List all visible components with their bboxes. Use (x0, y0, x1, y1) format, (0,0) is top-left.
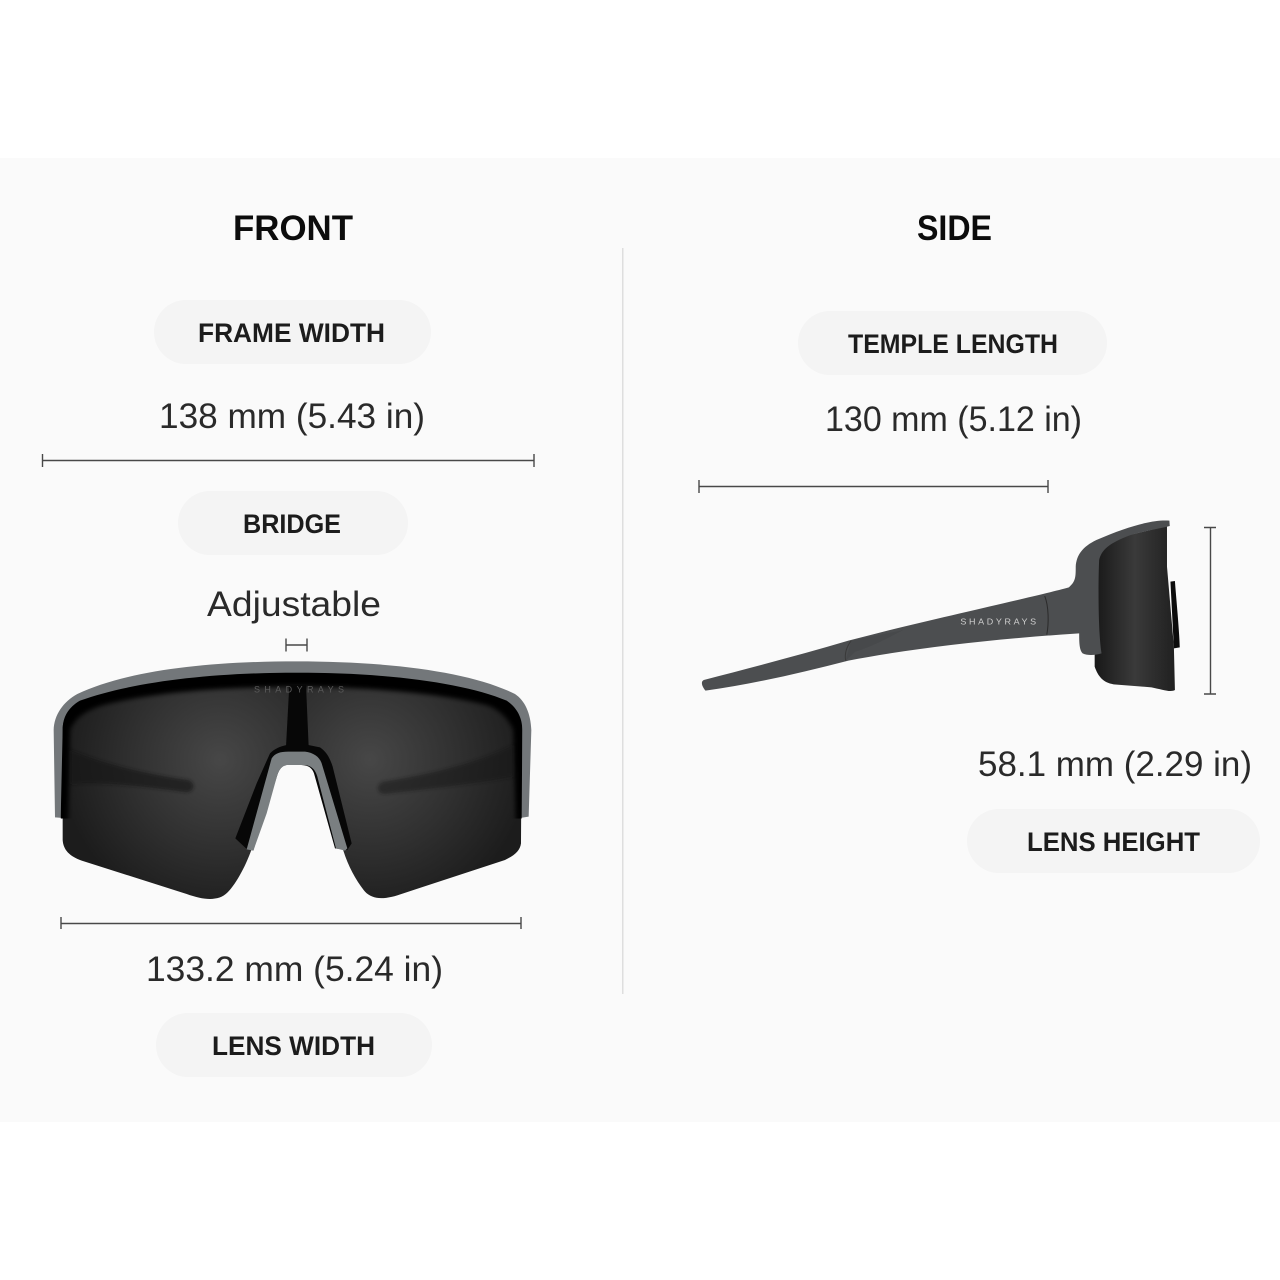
nose surround (235, 745, 352, 851)
bridge measure line (286, 638, 307, 652)
right lens (297, 673, 522, 898)
panel: front view (42, 209, 534, 1077)
temple facet (846, 630, 904, 661)
lens width label: LENS WIDTH (212, 1031, 375, 1061)
temple shadow right (378, 745, 513, 794)
lens height label (967, 809, 1260, 873)
logo: SHADYRAYS (254, 685, 344, 695)
bridge stem (286, 685, 309, 747)
panel: background (0, 158, 1280, 1122)
lens width measure line (61, 917, 521, 929)
lens edge (1170, 581, 1180, 648)
heading: side: SIDE (917, 209, 992, 248)
temple shadow left (71, 750, 194, 792)
bridge value: Adjustable (207, 585, 381, 624)
lens (1095, 526, 1175, 691)
temple arm and hinge (702, 520, 1170, 691)
temple length label (798, 311, 1107, 375)
divider (622, 248, 624, 994)
bridge label (178, 491, 408, 555)
temple length value: 130 mm (5.12 in) (825, 400, 1082, 439)
logo: SHADYRAYS (960, 617, 1036, 627)
panel: side view (699, 209, 1260, 873)
side sunglasses (702, 520, 1180, 691)
heading: front: FRONT (233, 209, 353, 248)
hinge seam (1045, 596, 1048, 635)
lens height measure line (1204, 527, 1216, 694)
frame width value: 138 mm (5.43 in) (159, 397, 425, 436)
bridge label: BRIDGE (243, 509, 341, 539)
temple tip seam (845, 641, 851, 661)
lens height value: 58.1 mm (2.29 in) (978, 745, 1252, 784)
temple length measure line (699, 480, 1048, 493)
lens width label (156, 1013, 432, 1077)
lens height label: LENS HEIGHT (1027, 827, 1200, 857)
frame width label (154, 300, 431, 364)
black upper band (60, 672, 522, 819)
frame width label: FRAME WIDTH (198, 318, 385, 348)
left lens (63, 673, 297, 899)
temple length label: TEMPLE LENGTH (848, 329, 1058, 359)
nose pad (247, 752, 347, 851)
frame width measure line (42, 454, 534, 467)
frame top (54, 661, 531, 818)
front sunglasses (53, 661, 533, 899)
lens width value: 133.2 mm (5.24 in) (146, 950, 443, 989)
